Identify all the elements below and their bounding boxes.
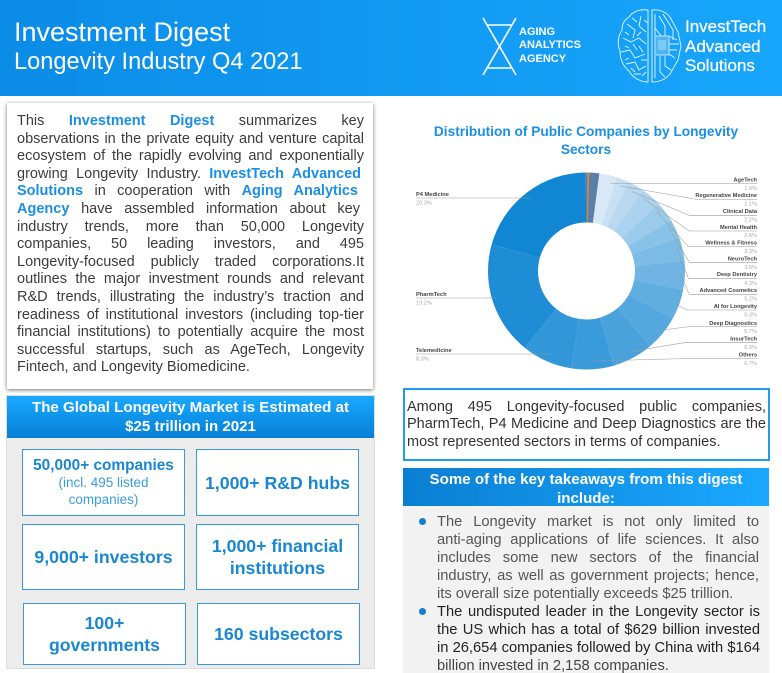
logo: Aging Analytics Agency: AGENCY [519,52,566,64]
logo text: InvestTech Advanced Solutions: Solutions [685,56,755,75]
bullet icon [419,608,426,615]
takeaway 1: includes some new sectors of the financial [437,550,759,566]
takeaway 2: in 26,654 companies followed by China with $164 [437,640,760,656]
donut chart: 1.9% [744,186,757,192]
takeaway 1: anti-aging applications of life sciences. It also [437,532,759,548]
donut chart: InsurTech [730,336,758,342]
donut chart: Advanced Cosmetics [699,288,757,294]
donut chart: 19.2% [416,300,432,306]
takeaway 1 [437,514,759,602]
takeaways heading [403,468,769,506]
donut chart: Wellness & Fitness [705,240,757,246]
donut chart: 6.7% [744,361,757,367]
header banner [0,0,782,96]
market heading [7,396,374,438]
introduction text: readiness of institutional investors (including top-tier [17,307,364,323]
panel: introduction [7,103,373,389]
market heading: $25 trillion in 2021 [125,418,256,435]
introduction text: Solutions in cooperation with Aging Analytics [17,183,358,199]
introduction text: Longevity-focused publicly traded corporations.It [17,254,364,270]
takeaway 1: its overall size potentially exceeds $25 trillion. [437,586,733,602]
introduction text: growing Longevity Industry. InvestTech Advanced [17,166,361,182]
chart title: Distribution of Public Companies by Longevity [434,124,738,139]
introduction text: observations in the private equity and venture capital [17,131,364,147]
logo text: InvestTech Advanced Solutions: Advanced [685,36,761,56]
introduction text: R&D trends, illustrating the industry’s traction and [17,289,364,305]
stat: subsectors: 160 subsectors [214,624,343,644]
takeaway 2: the US which has a total of $629 billion invested [437,622,760,638]
introduction text: ecosystem of the rapidly evolving and exponentially [17,148,364,164]
donut chart: Deep Dentistry [717,272,758,278]
takeaway 2 [437,604,760,673]
donut chart: 2.6% [744,233,757,239]
takeaways heading: Some of the key takeaways from this digest [430,470,742,488]
stat: financial institutions: institutions [230,558,325,578]
donut chart: 8.3% [416,356,429,362]
logo: brain icon [618,9,682,82]
chart title [434,124,738,157]
donut chart: NeuroTech [728,256,758,262]
stat: governments: 100+ [85,613,124,633]
stat: R&D hubs [196,449,359,516]
donut chart [416,172,758,370]
stat: companies: (incl. 495 listed [58,475,149,490]
stat: R&D hubs: 1,000+ R&D hubs [205,472,350,492]
callout: most represented sectors [403,388,770,461]
donut chart: PharmTech [416,292,447,298]
donut chart: Clinical Data [723,209,758,215]
takeaway 1: industry, as well as government projects; hence, [437,568,759,584]
donut chart: P4 Medicine [416,192,449,198]
donut chart: Deep Diagnostics [709,321,757,327]
introduction text: Agency have assembled information about key [17,201,360,217]
stat: companies: companies) [69,492,138,506]
callout: most represented sectors: PharmTech, P4 Medicine and Deep Diagnostics are the [407,416,766,432]
introduction text: successful startups, such as AgeTech, Longevity [17,342,364,358]
introduction text [17,113,364,375]
bullet icon [419,518,426,525]
logo: Aging Analytics Agency: AGING [519,26,555,38]
panel: takeaways [403,506,769,673]
title: Investment Digest [14,17,230,47]
takeaway 2: The undisputed leader in the Longevity sector is [437,604,760,620]
callout: most represented sectors: most represented sectors in terms of companies. [407,434,720,450]
donut chart: 2.2% [744,218,757,224]
donut chart: 20.3% [416,200,432,206]
stat: financial institutions: 1,000+ financial [212,536,343,556]
stat: subsectors [197,603,360,665]
stat: investors [22,524,185,590]
donut chart: 5.3% [744,312,757,318]
callout: most represented sectors: Among 495 Longevity-focused public companies, [407,398,766,414]
stat: governments [23,603,186,665]
donut chart: 6.3% [744,345,757,351]
logo text: InvestTech Advanced Solutions [684,17,766,75]
takeaway 1: The Longevity market is not only limited to [437,514,759,530]
stat: companies [22,449,185,516]
introduction text: industry trends, more than 50,000 Longevity [17,219,364,235]
donut chart: Others [739,352,757,358]
market heading: The Global Longevity Market is Estimated at [32,399,349,416]
donut chart: 3.5% [744,265,757,271]
introduction text: Fintech, and Longevity Biomedicine. [17,359,250,375]
introduction text: outlines the major investment rounds and relevant [17,271,364,287]
title: Longevity Industry Q4 2021 [14,49,303,75]
donut chart: AgeTech [733,178,758,184]
logo: Aging Analytics Agency [482,18,581,76]
donut chart: 5.7% [744,329,757,335]
donut chart: Regenerative Medicine [695,193,757,199]
stat: governments: governments [49,635,160,655]
stat: investors: 9,000+ investors [34,547,173,567]
stat: companies: 50,000+ companies [33,457,174,474]
donut chart: AI for Longevity [714,304,758,310]
donut chart: 4.3% [744,281,757,287]
donut chart: 2.1% [744,202,757,208]
logo text: InvestTech Advanced Solutions: InvestTech [685,17,766,36]
panel: global market [6,395,375,669]
takeaways heading: include: [557,490,615,506]
title [14,17,303,75]
introduction text: This Investment Digest summarizes key [17,113,364,129]
donut chart: Mental Health [720,225,758,231]
logo: Aging Analytics Agency: ANALYTICS [519,39,581,51]
introduction text: companies, 50 leading investors, and 495 [17,236,364,252]
stat: financial institutions [196,524,359,590]
donut chart: Telemedicine [416,348,452,354]
donut chart: 5.2% [744,296,757,302]
donut chart: 3.3% [744,249,757,255]
chart title: Sectors [561,142,611,157]
introduction text: financial institutions) to potentially acquire the most [17,324,364,340]
